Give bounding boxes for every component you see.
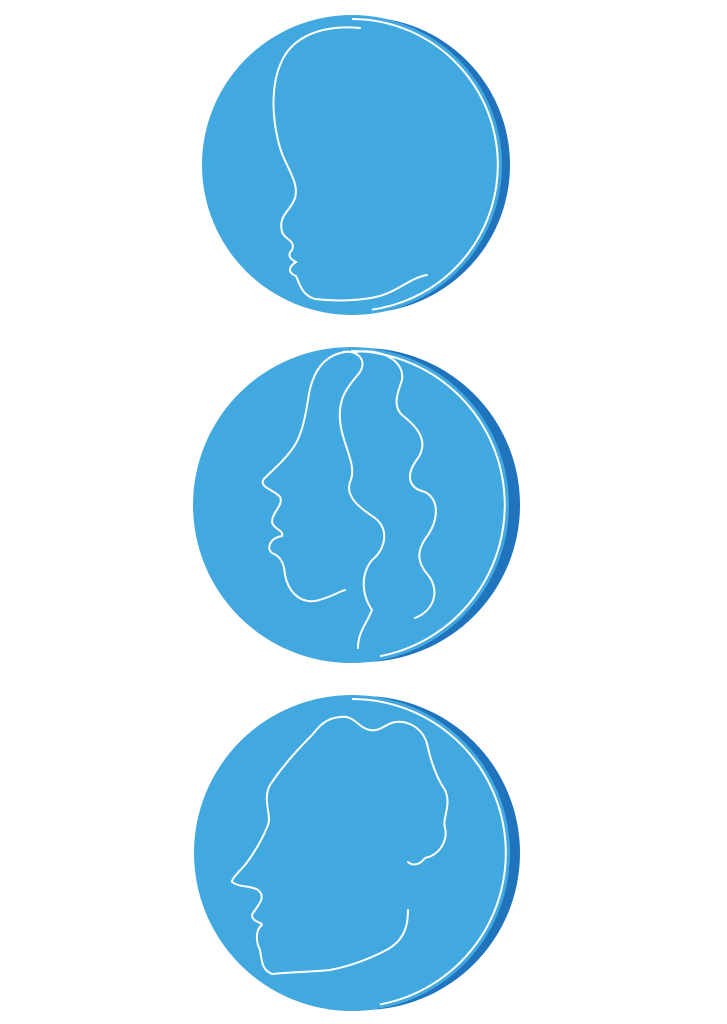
icon: baby face outline <box>274 27 427 300</box>
panel: older woman profile circle <box>194 695 520 1011</box>
panel: baby profile circle <box>202 15 510 315</box>
panel: young woman profile circle <box>193 347 520 663</box>
icon: young woman face outline <box>263 351 436 648</box>
icon: older woman face outline <box>232 717 448 974</box>
